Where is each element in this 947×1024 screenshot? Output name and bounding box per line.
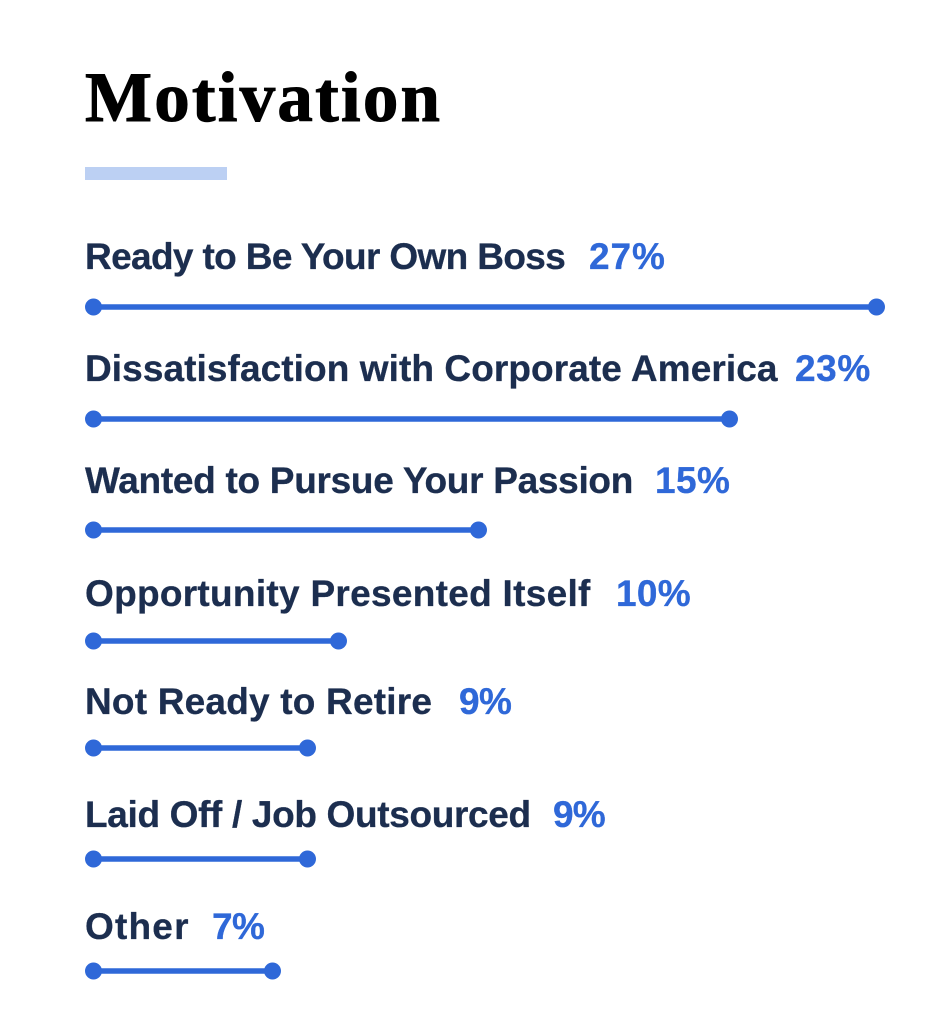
bar	[85, 962, 281, 980]
bar	[85, 850, 316, 868]
title accent bar	[85, 167, 227, 180]
bar	[85, 740, 316, 756]
label: Dissatisfaction with Corporate America	[85, 348, 778, 389]
value: 9%	[553, 794, 605, 835]
row: Ready to Be Your Own Boss	[85, 236, 885, 316]
row: Wanted to Pursue Your Passion	[84, 460, 730, 538]
row: Laid Off / Job Outsourced	[85, 794, 605, 868]
label: Other	[85, 906, 190, 947]
bar	[85, 298, 885, 316]
value: 10%	[616, 573, 691, 614]
title: Motivation	[85, 59, 442, 137]
label: Laid Off / Job Outsourced	[85, 794, 531, 835]
value: 7%	[212, 906, 264, 947]
row: Opportunity Presented Itself	[85, 573, 691, 650]
value: 23%	[795, 348, 871, 389]
row: Other	[85, 906, 281, 980]
value: 15%	[655, 460, 730, 501]
value: 27%	[589, 236, 666, 277]
label: Opportunity Presented Itself	[85, 573, 591, 614]
label: Ready to Be Your Own Boss	[85, 236, 565, 277]
value: 9%	[459, 681, 511, 722]
bar	[85, 522, 487, 538]
row: Not Ready to Retire	[85, 681, 512, 756]
label: Not Ready to Retire	[85, 681, 432, 722]
row: Dissatisfaction with Corporate America	[85, 348, 871, 428]
label: Wanted to Pursue Your Passion	[85, 460, 633, 501]
bar	[85, 410, 738, 428]
bar	[85, 632, 347, 650]
